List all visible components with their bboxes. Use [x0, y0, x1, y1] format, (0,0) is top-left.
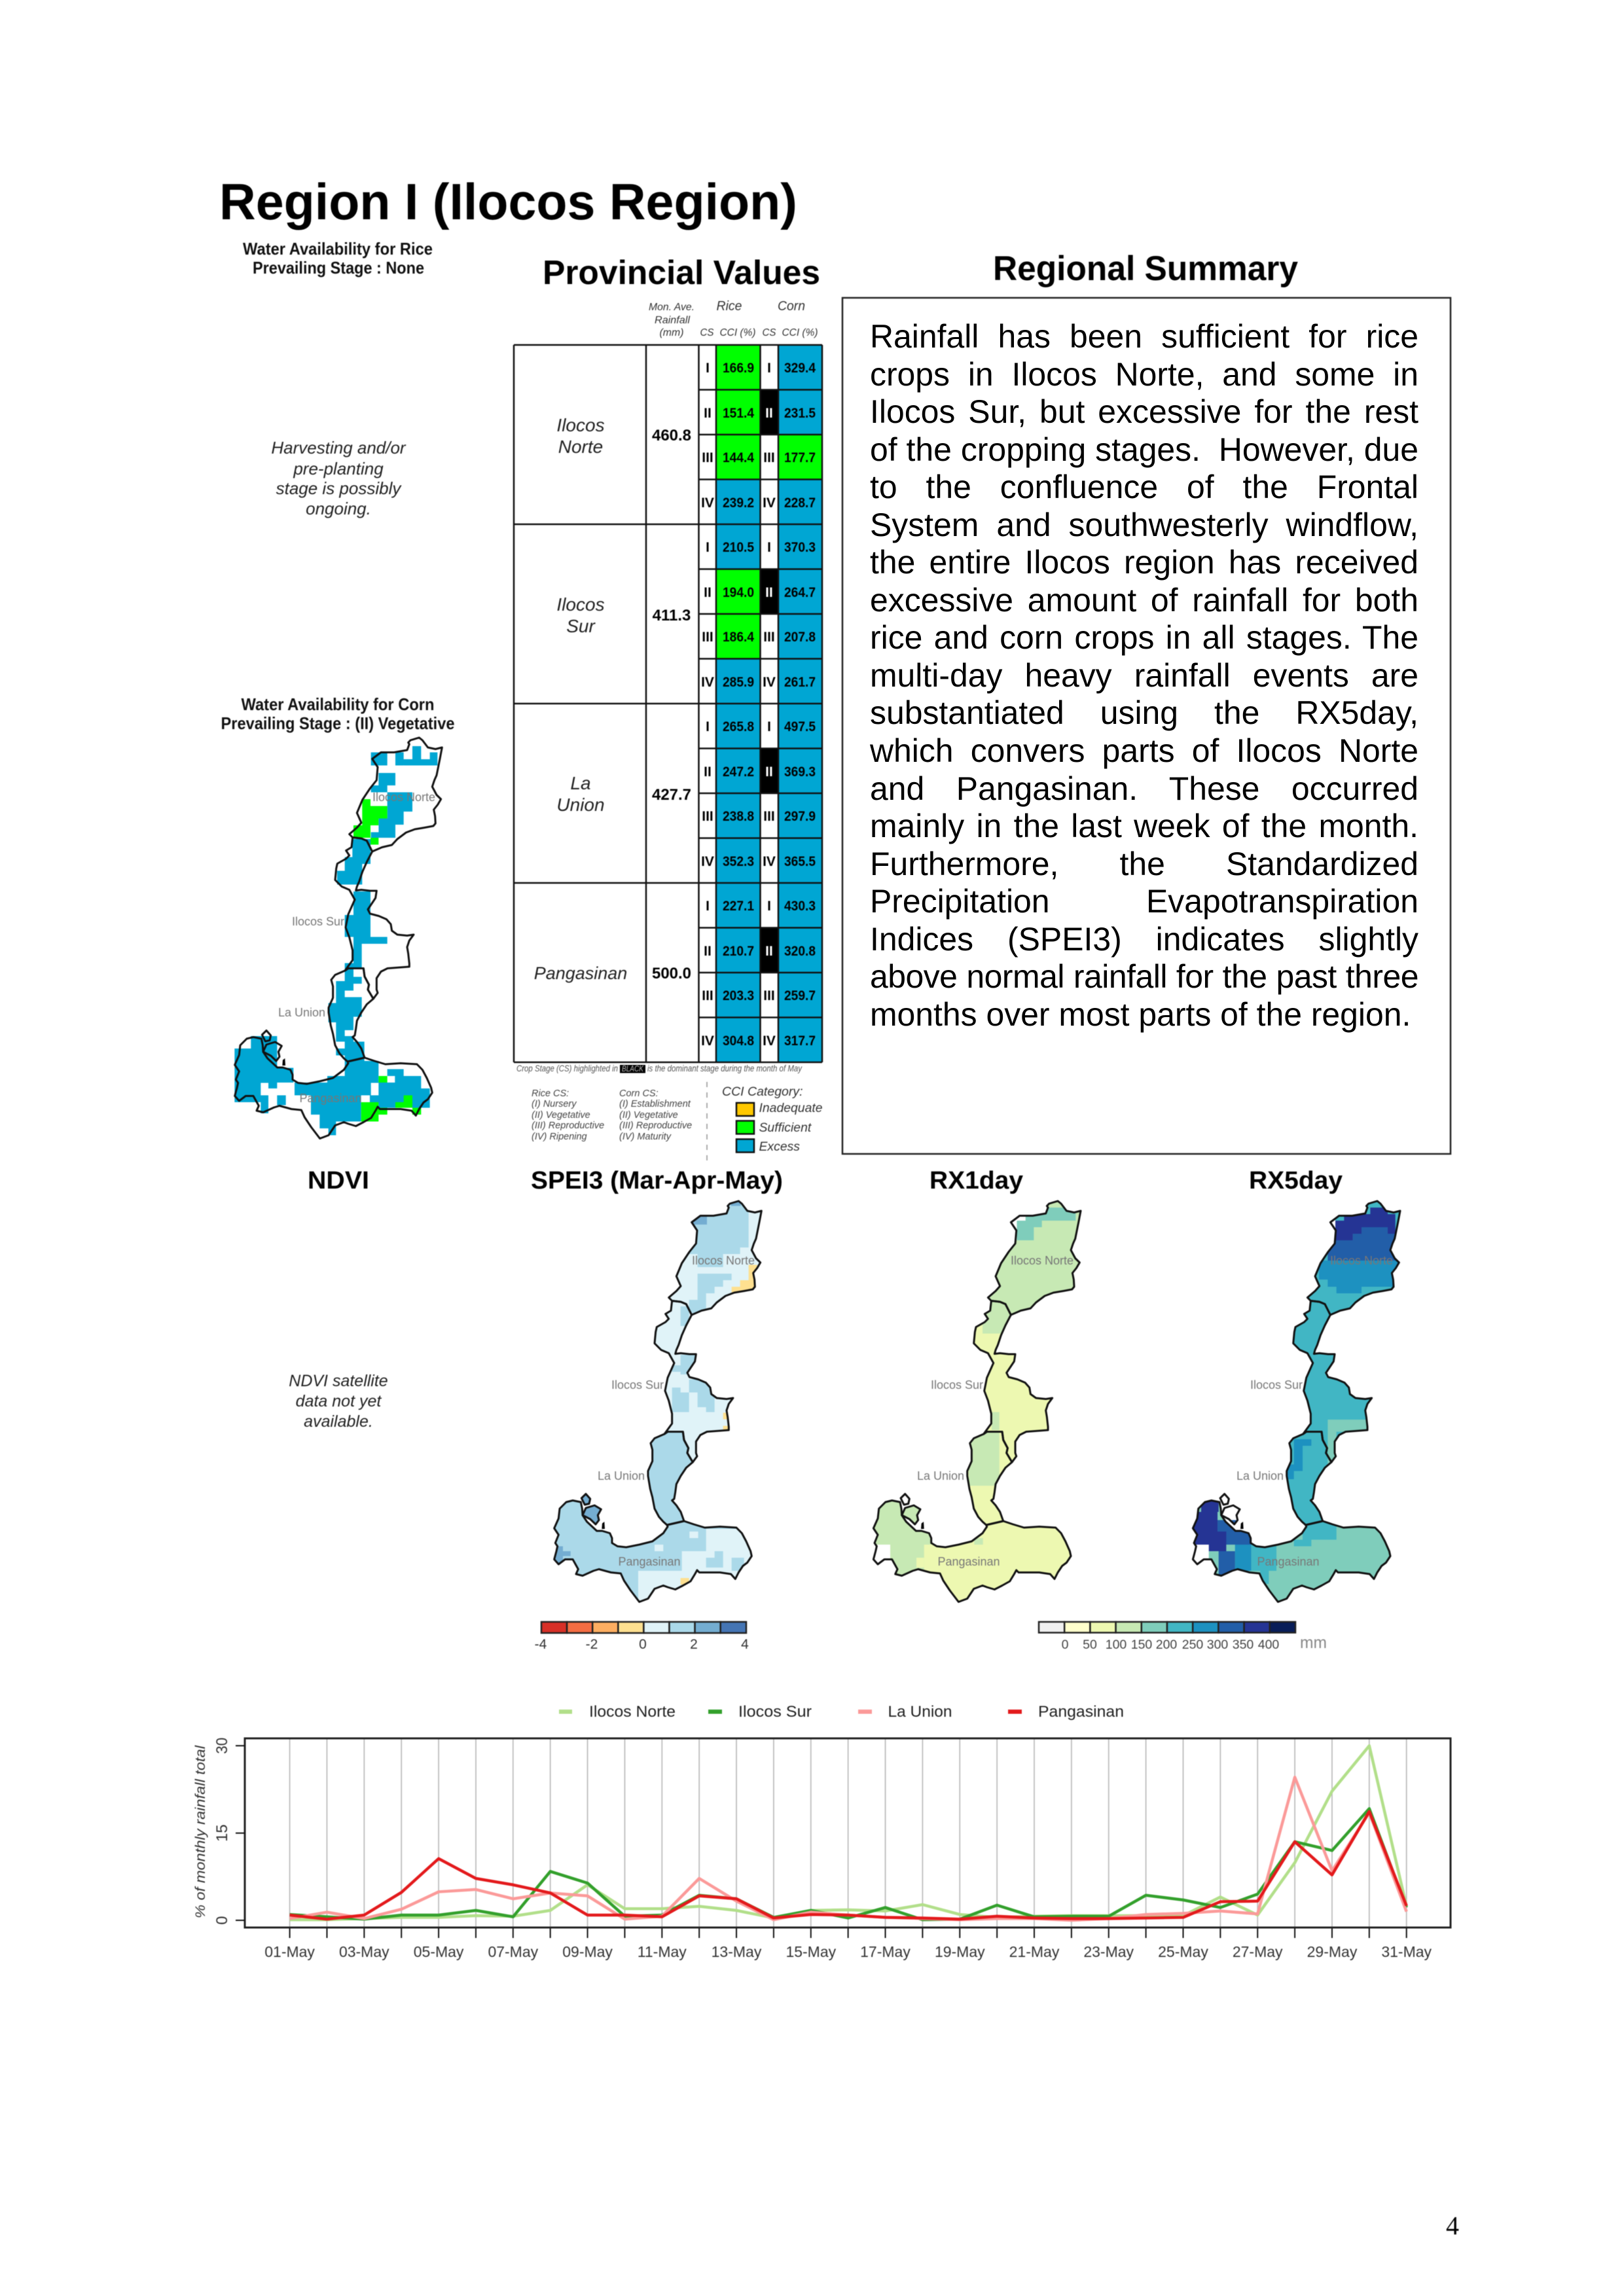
heading: SPEI3: SPEI3 (Mar-Apr-May) — [531, 1167, 783, 1194]
row group: La Union: 365.5 — [784, 854, 816, 869]
row group: Ilocos Norte — [556, 361, 816, 511]
map: RX1day: Ilocos Norte — [1011, 1254, 1074, 1267]
rainfall colour bar (mm): 0 — [1062, 1638, 1069, 1652]
regional summary text: Indices (SPEI3) indicates slightly — [870, 921, 1418, 958]
map: SPEI3 — [554, 1201, 761, 1604]
table column headers — [649, 299, 818, 338]
legend: corn crop stages: (III) Reproductive — [619, 1121, 692, 1131]
regional summary text: the entire Ilocos region has received — [870, 544, 1418, 581]
table footnote: is the dominant stage during the month of May — [647, 1064, 803, 1073]
table column headers: Rainfall — [655, 315, 690, 326]
legend: CCI category: Inadequate — [759, 1101, 823, 1115]
regional summary text: which convers parts of Ilocos Norte — [870, 732, 1418, 769]
row group: Ilocos Sur: Ilocos — [556, 594, 605, 615]
row group: Pangasinan: I — [767, 899, 771, 914]
regional summary text: of the cropping stages. However, due — [870, 431, 1418, 468]
rainfall colour bar (mm): 200 — [1156, 1638, 1177, 1652]
row group: La Union: 297.9 — [784, 809, 816, 824]
map: RX5day: Pangasinan — [1257, 1555, 1320, 1568]
rainfall colour bar (mm): 100 — [1106, 1638, 1127, 1652]
row group: Ilocos Norte: II — [765, 406, 773, 421]
row group: Ilocos Norte: IV — [701, 495, 714, 511]
row group: La Union: III — [702, 809, 713, 824]
row group: Pangasinan: Pangasinan — [534, 963, 627, 983]
row group: Ilocos Norte: I — [767, 361, 771, 376]
table footnote: BLACK — [622, 1064, 644, 1073]
row group: La Union — [556, 719, 816, 869]
x axis date labels: 23-May — [1083, 1943, 1134, 1960]
map: RX1day: La Union — [917, 1469, 964, 1482]
regional summary box — [842, 298, 1451, 1154]
map: RX1day: Ilocos Sur — [931, 1378, 983, 1391]
x axis date labels: 01-May — [264, 1943, 315, 1960]
rainfall chart legend: Ilocos Norte — [589, 1703, 676, 1721]
row group: La Union: 352.3 — [723, 854, 754, 869]
row group: La Union: IV — [763, 854, 776, 869]
row group: Ilocos Sur: 186.4 — [723, 630, 754, 645]
legend: CCI category: CCI Category: — [722, 1085, 803, 1099]
map: SPEI3: Pangasinan — [618, 1555, 681, 1568]
row group: La Union: 497.5 — [784, 719, 816, 734]
page number: 4 — [1446, 2211, 1459, 2240]
row group: Pangasinan: 320.8 — [784, 944, 816, 959]
heading: regional summary: Regional Summary — [993, 249, 1298, 288]
regional summary text: months over most parts of the region. — [870, 996, 1411, 1033]
rainfall chart legend: Ilocos Sur — [738, 1703, 812, 1721]
regional summary text: rice and corn crops in all stages. The — [870, 619, 1418, 656]
x axis date labels: 11-May — [638, 1943, 687, 1960]
row group: La Union: 265.8 — [723, 719, 754, 734]
row group: La Union: II — [765, 764, 773, 780]
row group: Ilocos Sur — [556, 540, 816, 690]
row group: Pangasinan: 210.7 — [723, 944, 754, 959]
SPEI colour bar: 2 — [690, 1637, 698, 1652]
y axis tick labels: 15 — [213, 1824, 231, 1842]
y axis tick labels: 0 — [213, 1916, 231, 1925]
row group: La Union: 369.3 — [784, 764, 816, 780]
x axis date labels: 25-May — [1158, 1943, 1208, 1960]
rainfall colour bar (mm): 150 — [1131, 1638, 1152, 1652]
row group: Ilocos Sur: 207.8 — [784, 630, 816, 645]
row group: Ilocos Sur: 261.7 — [784, 675, 816, 690]
map: corn water availability: Ilocos Norte — [372, 791, 435, 804]
row group: La Union: La — [570, 773, 591, 793]
SPEI colour bar — [535, 1622, 749, 1652]
row group: Ilocos Norte: II — [704, 406, 712, 421]
row group: Pangasinan: 430.3 — [784, 899, 816, 914]
heading: water availability for corn — [221, 694, 454, 733]
regional summary text: excessive amount of rainfall for both — [870, 582, 1418, 619]
heading: water availability for rice: Water Availability for Rice — [243, 239, 433, 259]
heading: water availability for rice — [243, 239, 433, 278]
row group: La Union: 427.7 — [652, 786, 691, 804]
y axis title: % of monthly rainfall total — [193, 1744, 208, 1918]
legend: corn crop stages: (IV) Maturity — [619, 1132, 672, 1142]
table footnote — [516, 1064, 803, 1073]
rainfall chart legend: La Union — [888, 1703, 952, 1721]
heading: water availability for corn: Water Availability for Corn — [241, 694, 435, 714]
heading: water availability for corn: Prevailing Stage : (II) Vegetative — [221, 713, 454, 733]
table column headers: CCI (%) — [720, 327, 755, 338]
NDVI note: NDVI satellite — [289, 1372, 388, 1390]
row group: Pangasinan: 304.8 — [723, 1033, 754, 1049]
table column headers: CCI (%) — [782, 327, 818, 338]
x axis date labels: 07-May — [488, 1943, 539, 1960]
x axis date labels: 19-May — [935, 1943, 985, 1960]
row group: La Union: Union — [556, 795, 605, 815]
row group: La Union: III — [763, 809, 775, 824]
heading: provincial values: Provincial Values — [543, 254, 820, 292]
table column headers: Rice — [716, 299, 742, 314]
map: SPEI3: La Union — [598, 1469, 645, 1482]
table column headers: Mon. Ave. — [649, 302, 695, 313]
row group: Pangasinan: 317.7 — [784, 1033, 816, 1049]
row group: Ilocos Norte: IV — [763, 495, 776, 511]
legend: CCI category — [722, 1085, 823, 1154]
row group: Ilocos Sur: 370.3 — [784, 540, 816, 555]
row group: La Union: I — [767, 719, 771, 734]
x axis date labels: 15-May — [785, 1943, 837, 1960]
rainfall chart legend — [559, 1703, 1124, 1721]
x axis date labels: 29-May — [1307, 1943, 1358, 1960]
legend: corn crop stages — [619, 1088, 692, 1142]
x axis date labels: 31-May — [1381, 1943, 1432, 1960]
rainfall colour bar (mm): mm — [1300, 1634, 1327, 1652]
row group: Ilocos Norte: 166.9 — [723, 361, 754, 376]
row group: Ilocos Sur: Sur — [566, 616, 596, 636]
legend: corn crop stages: (II) Vegetative — [619, 1110, 678, 1121]
heading: RX5day: RX5day — [1249, 1167, 1343, 1194]
row group: Ilocos Norte: 144.4 — [723, 450, 754, 465]
row group: Ilocos Norte: Norte — [558, 437, 603, 457]
regional summary text: multi-day heavy rainfall events are — [870, 657, 1418, 694]
NDVI note: data not yet — [296, 1392, 382, 1410]
row group: Pangasinan: I — [706, 899, 710, 914]
map: SPEI3: Ilocos Sur — [611, 1378, 664, 1391]
table column headers: CS — [700, 327, 714, 338]
regional summary text: substantiated using the RX5day, — [870, 694, 1418, 731]
y axis tick labels — [213, 1738, 231, 1925]
regional summary text: Precipitation Evapotranspiration — [870, 883, 1418, 920]
regional summary text: to the confluence of the Frontal — [870, 469, 1418, 505]
rainfall colour bar (mm) — [1039, 1622, 1327, 1652]
row group: Ilocos Sur: I — [767, 540, 771, 555]
row group: Ilocos Norte: III — [763, 450, 775, 465]
regional summary text: above normal rainfall for the past three — [870, 958, 1418, 995]
row group: Ilocos Norte: 228.7 — [784, 495, 816, 511]
table column headers: (mm) — [660, 327, 683, 338]
table column headers: Corn — [778, 299, 805, 314]
legend: rice crop stages: Rice CS: — [532, 1088, 569, 1099]
regional summary text: crops in Ilocos Norte, and some in — [870, 356, 1418, 393]
row group: Ilocos Norte: Ilocos — [556, 415, 605, 435]
row group: Ilocos Sur: IV — [701, 675, 714, 690]
row group: Pangasinan: 203.3 — [723, 988, 754, 1003]
row group: La Union: 238.8 — [723, 809, 754, 824]
regional summary text: Furthermore, the Standardized — [870, 846, 1418, 882]
row group: La Union: II — [704, 764, 712, 780]
legend: CCI category: Sufficient — [759, 1121, 812, 1135]
row group: Pangasinan: II — [765, 944, 773, 959]
heading: water availability for rice: Prevailing Stage : None — [253, 258, 424, 278]
legend: corn crop stages: Corn CS: — [619, 1088, 659, 1099]
legend: rice crop stages: (III) Reproductive — [532, 1121, 604, 1131]
legend: rice crop stages: (II) Vegetative — [532, 1110, 590, 1121]
rice stage note: Harvesting and/or — [271, 438, 406, 457]
SPEI colour bar: -4 — [535, 1637, 547, 1652]
NDVI note — [289, 1372, 388, 1431]
heading: NDVI: NDVI — [308, 1167, 369, 1194]
map: RX1day — [873, 1201, 1081, 1602]
row group: Ilocos Norte: 460.8 — [652, 427, 691, 444]
regional summary text: and Pangasinan. These occurred — [870, 770, 1418, 807]
row group: Ilocos Sur: I — [706, 540, 710, 555]
map: corn water availability: Ilocos Sur — [292, 915, 344, 928]
x axis date labels: 05-May — [414, 1943, 464, 1960]
map: RX5day: La Union — [1236, 1469, 1284, 1482]
row group: Pangasinan: 500.0 — [652, 965, 691, 982]
x axis date labels: 13-May — [712, 1943, 762, 1960]
row group: Pangasinan: IV — [701, 1033, 714, 1049]
rice stage note: stage is possibly — [276, 478, 402, 498]
row group: Ilocos Norte: 239.2 — [723, 495, 754, 511]
rainfall colour bar (mm): 400 — [1258, 1638, 1279, 1652]
row group: Pangasinan: III — [702, 988, 713, 1003]
provincial values table — [514, 345, 822, 1062]
row group: Ilocos Sur: II — [704, 585, 712, 600]
row group: La Union: I — [706, 719, 710, 734]
legend: rice crop stages — [532, 1088, 604, 1142]
rice stage note: ongoing. — [306, 499, 371, 518]
rice stage note: pre-planting — [293, 459, 384, 478]
row group: Pangasinan: II — [704, 944, 712, 959]
SPEI colour bar: -2 — [586, 1637, 598, 1652]
map: RX1day: Pangasinan — [937, 1555, 1000, 1568]
row group: Pangasinan: IV — [763, 1033, 776, 1049]
row group: La Union: IV — [701, 854, 714, 869]
row group: Ilocos Sur: 411.3 — [653, 607, 691, 624]
row group: Ilocos Sur: 285.9 — [723, 675, 754, 690]
rainfall colour bar (mm): 350 — [1233, 1638, 1254, 1652]
map: corn water availability: La Union — [278, 1006, 325, 1019]
rainfall colour bar (mm): 300 — [1207, 1638, 1228, 1652]
rainfall colour bar (mm): 250 — [1182, 1638, 1203, 1652]
regional summary text — [870, 318, 1418, 1033]
x axis date labels: 27-May — [1233, 1943, 1283, 1960]
regional summary text: Rainfall has been sufficient for rice — [870, 318, 1418, 355]
row group: Ilocos Sur: 210.5 — [723, 540, 754, 555]
map: RX5day: Ilocos Sur — [1250, 1378, 1303, 1391]
row group: Ilocos Norte: I — [706, 361, 710, 376]
x axis date labels: 21-May — [1009, 1943, 1060, 1960]
y axis tick labels: 30 — [213, 1738, 231, 1754]
row group: Pangasinan: 227.1 — [723, 899, 754, 914]
legend: rice crop stages: (IV) Ripening — [532, 1132, 587, 1142]
row group: Ilocos Norte: 329.4 — [784, 361, 816, 376]
map: RX5day: Ilocos Norte — [1330, 1254, 1393, 1267]
rainfall colour bar (mm): 50 — [1083, 1638, 1097, 1652]
title: Region I (Ilocos Region) — [219, 173, 797, 230]
row group: La Union: 247.2 — [723, 764, 754, 780]
row group: Ilocos Norte: 231.5 — [784, 406, 816, 421]
row group: Pangasinan: III — [763, 988, 775, 1003]
SPEI colour bar: 0 — [639, 1637, 647, 1652]
rainfall chart legend: Pangasinan — [1038, 1703, 1124, 1721]
row group: Ilocos Sur: III — [763, 630, 775, 645]
daily rainfall line chart — [193, 1738, 1451, 1960]
row group: Ilocos Norte: 151.4 — [723, 406, 754, 421]
map: RX5day — [1193, 1201, 1400, 1602]
x axis date labels — [264, 1943, 1432, 1960]
map: SPEI3: Ilocos Norte — [692, 1254, 755, 1267]
regional summary text: mainly in the last week of the month. — [870, 808, 1418, 844]
legend: CCI category: Excess — [759, 1139, 800, 1154]
legend: rice crop stages: (I) Nursery — [532, 1099, 577, 1109]
row group: Ilocos Norte: 177.7 — [784, 450, 816, 465]
row group: Ilocos Sur: 194.0 — [723, 585, 754, 600]
SPEI colour bar: 4 — [741, 1637, 749, 1652]
x axis date labels: 17-May — [860, 1943, 911, 1960]
row group: Pangasinan: 259.7 — [784, 988, 816, 1003]
rice stage note — [271, 438, 406, 518]
table column headers: CS — [762, 327, 776, 338]
row group: Ilocos Sur: II — [765, 585, 773, 600]
x axis date labels: 03-May — [339, 1943, 389, 1960]
regional summary text: System and southwesterly windflow, — [870, 507, 1418, 543]
row group: Ilocos Sur: IV — [763, 675, 776, 690]
x axis date labels: 09-May — [562, 1943, 613, 1960]
table footnote: Crop Stage (CS) highlighted in — [516, 1064, 618, 1073]
row group: Ilocos Sur: III — [702, 630, 713, 645]
map: corn water availability: Pangasinan — [299, 1092, 362, 1105]
heading: RX1day: RX1day — [929, 1167, 1023, 1194]
regional summary text: Ilocos Sur, but excessive for the rest — [870, 393, 1418, 430]
row group: Pangasinan — [534, 899, 816, 1049]
NDVI note: available. — [304, 1412, 373, 1431]
map: corn water availability — [234, 738, 442, 1139]
legend: corn crop stages: (I) Establishment — [619, 1099, 691, 1109]
row group: Ilocos Norte: III — [702, 450, 713, 465]
row group: Ilocos Sur: 264.7 — [784, 585, 816, 600]
